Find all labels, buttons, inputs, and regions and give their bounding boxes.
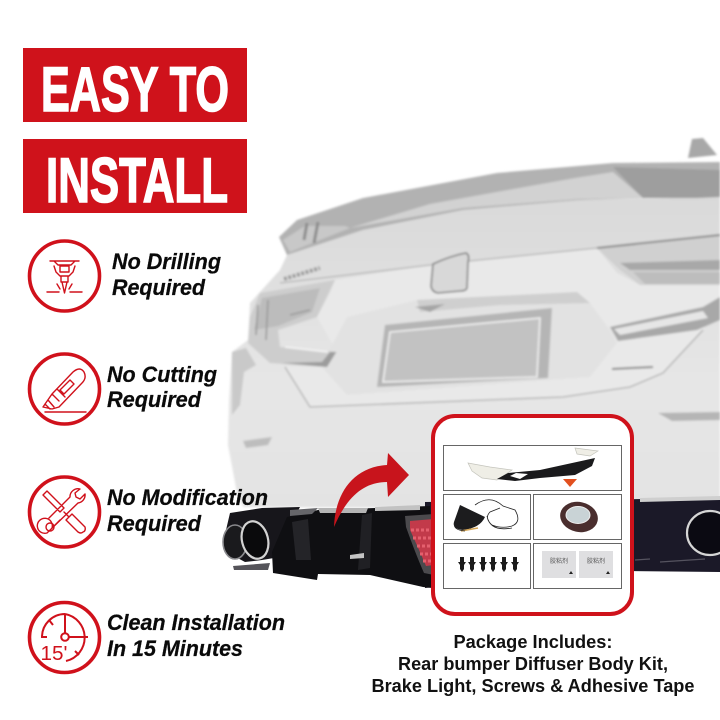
licence plate: [377, 308, 552, 387]
package includes caption: Package Includes:: [454, 631, 612, 652]
feature: no modification: [30, 477, 268, 547]
title banner: install: [23, 139, 247, 216]
feature: no drilling: [30, 241, 222, 311]
spoiler: [279, 162, 720, 255]
diffuser and exhausts: [223, 496, 720, 588]
emblem: [431, 253, 469, 293]
panel: package contents: [433, 416, 632, 614]
feature: clean installation: [30, 602, 285, 672]
title banner: easy to: [23, 48, 247, 125]
right exhaust ring: [687, 511, 720, 555]
trunk crease line: [280, 235, 720, 283]
brake light: [405, 514, 434, 575]
trunk lower panel: [285, 248, 720, 407]
package includes caption: [372, 631, 694, 696]
reflector left: [243, 437, 272, 448]
cell: diffuser kit: [444, 446, 622, 490]
cell: brake light and wiring: [444, 494, 530, 540]
bracket: [233, 563, 270, 570]
label: Required: [107, 387, 202, 412]
car photo: rear of sedan, greyed out: [228, 138, 720, 508]
curved red arrow: [334, 453, 409, 527]
package includes caption: Brake Light, Screws & Adhesive Tape: [372, 675, 694, 696]
cell: screws: [444, 544, 530, 588]
feature: no cutting: [30, 354, 218, 424]
label: No Modification: [107, 485, 268, 510]
right black band: [425, 498, 720, 588]
car body: [228, 197, 720, 508]
title banner: easy to: EASY TO: [41, 55, 229, 125]
icon: drill: [30, 241, 100, 311]
model badges: [284, 268, 653, 369]
cell: adhesive packets: 胶粘剂: [550, 557, 568, 565]
icon: wrench and screwdriver: [30, 477, 100, 547]
exhaust housing: [226, 507, 300, 562]
icon: utility knife: [30, 354, 100, 424]
right trim: [610, 297, 720, 341]
side mirror area: [232, 348, 256, 415]
lower trunk edge: [285, 330, 703, 407]
cell: adhesive tape roll: [534, 494, 622, 540]
cell: adhesive packets: 胶粘剂: [587, 557, 605, 565]
package includes caption: Rear bumper Diffuser Body Kit,: [398, 653, 668, 674]
right taillight: [597, 235, 720, 285]
label: Clean Installation: [107, 610, 285, 635]
left taillight: [248, 280, 337, 367]
label: Required: [112, 275, 206, 300]
clock minutes: 15': [40, 643, 68, 665]
reflector right: [658, 412, 720, 421]
antenna: [688, 138, 717, 158]
centre diffuser fins: [272, 505, 432, 588]
label: Required: [107, 511, 202, 536]
plate recess: [320, 293, 617, 395]
exhaust pipes: [223, 518, 272, 562]
label: No Cutting: [107, 362, 218, 387]
icon: 15 minute clock: [30, 602, 100, 672]
label: In 15 Minutes: [107, 636, 243, 661]
cell: adhesive packets: [534, 544, 622, 588]
label: No Drilling: [112, 249, 222, 274]
title banner: install: INSTALL: [46, 146, 228, 216]
